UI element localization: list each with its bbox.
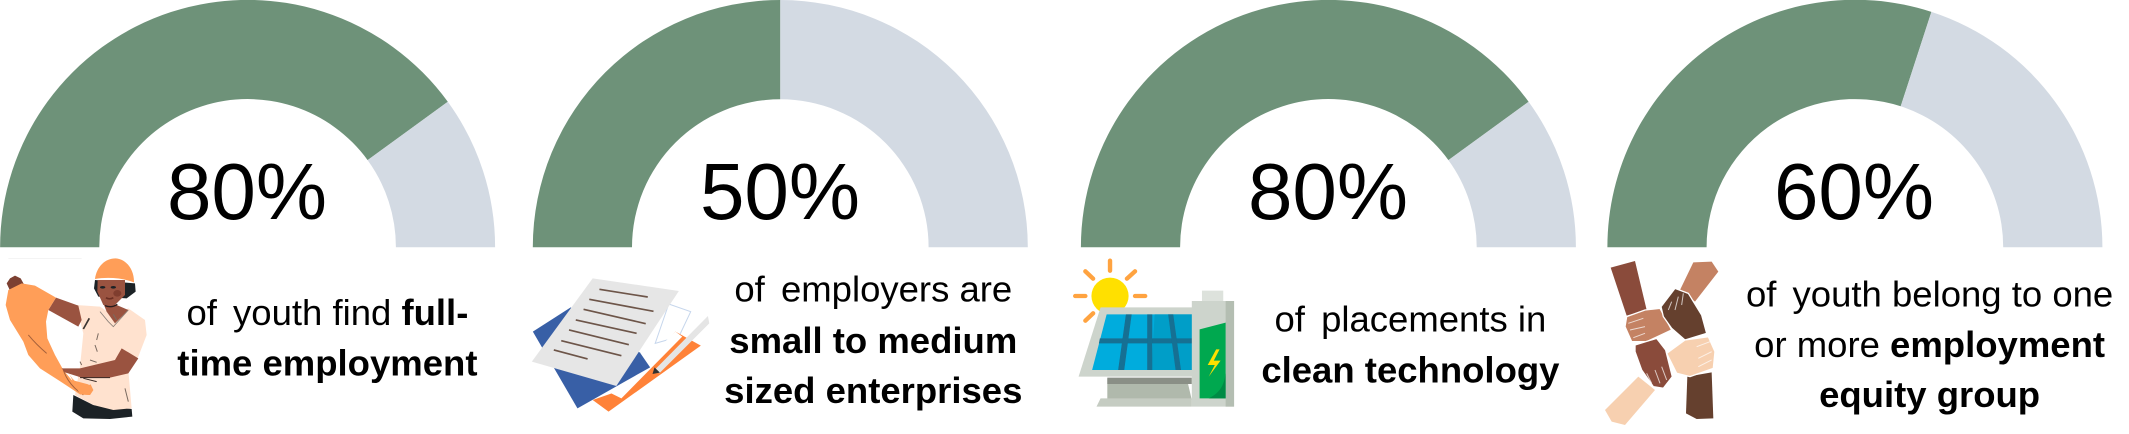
caption: small to medium sized enterprises: small to medium (729, 320, 1017, 361)
caption: full-time employment: time employment (177, 342, 477, 384)
caption: employment equity group: or more employment (1754, 324, 2105, 365)
icon: papers and pencil (532, 278, 709, 412)
percentage: 50%: 50% (700, 147, 860, 236)
percentage: 80%: 80% (167, 147, 327, 236)
panel: employment equity group (1605, 0, 2113, 425)
caption: employment equity group: of youth belong to one (1746, 274, 2113, 314)
caption: clean technology: clean technology (1261, 350, 1560, 390)
percentage: 80%: 80% (1248, 147, 1408, 236)
caption: small to medium sized enterprises: of employers are (734, 268, 1012, 310)
icon: four interlinked hands (1605, 261, 1718, 425)
panel: small to medium enterprises (532, 0, 1028, 412)
gauge: 80% clean technology (1081, 0, 1576, 247)
percentage: 60%: 60% (1774, 147, 1934, 236)
icon: solar panel and battery (1075, 261, 1234, 407)
gauge: 60% equity group (1607, 0, 2102, 247)
gauge: 80% youth full-time (0, 0, 495, 247)
panel: clean technology (1075, 0, 1576, 407)
caption: full-time employment: of youth find full- (186, 292, 468, 333)
icon: worker holding blueprint (6, 258, 147, 419)
caption: small to medium sized enterprises: sized enterprises (724, 370, 1022, 411)
caption: employment equity group: equity group (1819, 374, 2040, 415)
gauge: 50% employers (533, 0, 1028, 247)
panel: full-time employment (0, 0, 495, 419)
caption: clean technology: of placements in (1274, 298, 1546, 340)
